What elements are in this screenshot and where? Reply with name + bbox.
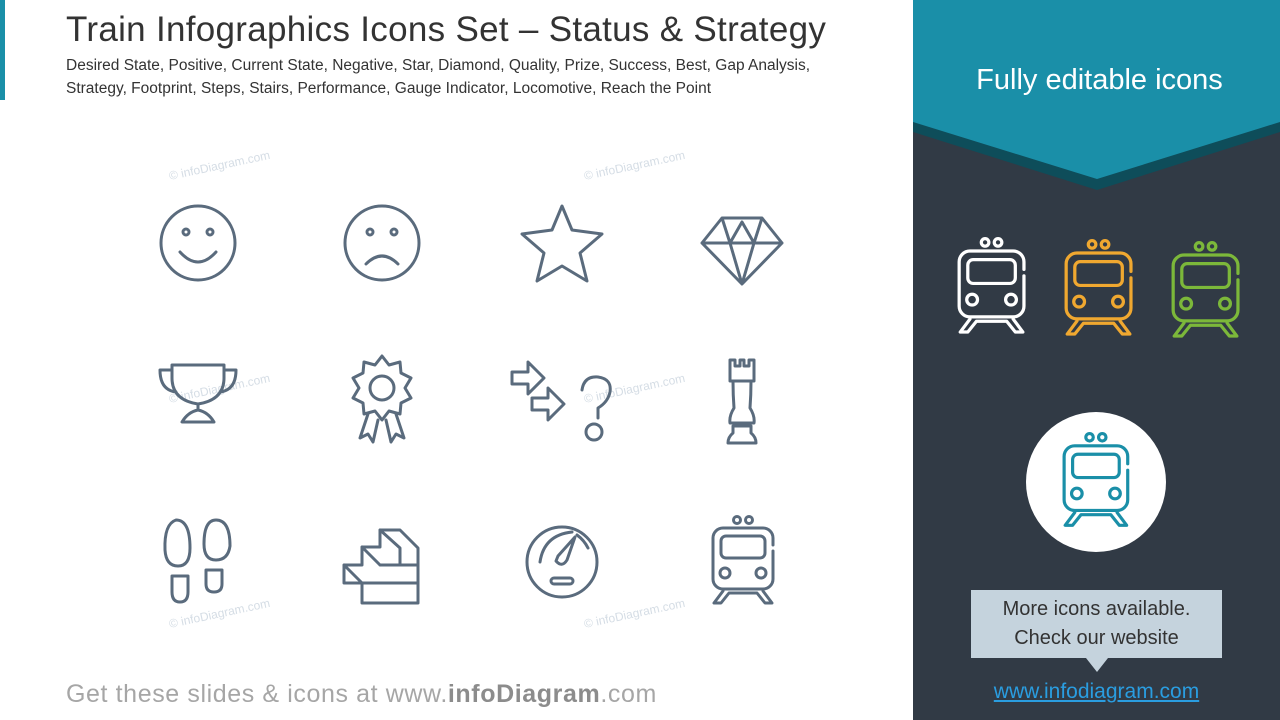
icon grid bbox=[158, 148, 784, 631]
footer: Get these slides & icons at www.infoDiagram.com bbox=[66, 680, 657, 708]
icon: train gray bbox=[713, 516, 773, 603]
right panel bbox=[913, 0, 1280, 720]
link: www.infodiagram.com bbox=[994, 680, 1199, 703]
white circle badge bbox=[1026, 412, 1166, 552]
icon: smile bbox=[161, 206, 235, 280]
callout box bbox=[971, 590, 1222, 672]
watermarks: © infoDiagram.com bbox=[583, 371, 686, 406]
callout text: More icons available. bbox=[1003, 598, 1190, 620]
callout text: Check our website bbox=[1014, 627, 1179, 649]
watermarks: © infoDiagram.com bbox=[168, 148, 271, 183]
icon: gauge bbox=[527, 527, 597, 597]
icon: train teal bbox=[1064, 434, 1128, 525]
watermarks bbox=[168, 148, 686, 631]
callout text bbox=[1003, 598, 1190, 649]
icon: diamond bbox=[702, 218, 782, 284]
watermarks: © infoDiagram.com bbox=[168, 596, 271, 631]
panel heading: Fully editable icons bbox=[976, 64, 1223, 96]
watermarks: © infoDiagram.com bbox=[583, 148, 686, 183]
accent bar bbox=[0, 0, 5, 100]
icon: star bbox=[522, 206, 602, 281]
icon: train white bbox=[959, 239, 1024, 332]
icon: sad bbox=[345, 206, 419, 280]
icon: train orange bbox=[1066, 241, 1131, 334]
watermarks: © infoDiagram.com bbox=[583, 596, 686, 631]
title: Train Infographics Icons Set – Status & Strategy bbox=[66, 10, 826, 49]
watermarks: © infoDiagram.com bbox=[168, 371, 271, 406]
icon: chess rook bbox=[728, 360, 756, 443]
icon: footprints bbox=[165, 520, 230, 602]
icon: train green bbox=[1173, 243, 1238, 336]
icon: prize rosette bbox=[353, 356, 411, 442]
icon: gap analysis bbox=[512, 362, 610, 440]
icon: trophy bbox=[160, 365, 236, 422]
icon: stairs bbox=[344, 530, 418, 603]
subtitle: Desired State, Positive, Current State, Negative, Star, Diamond, Quality, Prize, Success, Best, Gap Analysis, Strategy, Footprint, Steps, Stairs, Performance, Gauge Indicator, Locomotive, Reach the Point bbox=[66, 57, 810, 97]
